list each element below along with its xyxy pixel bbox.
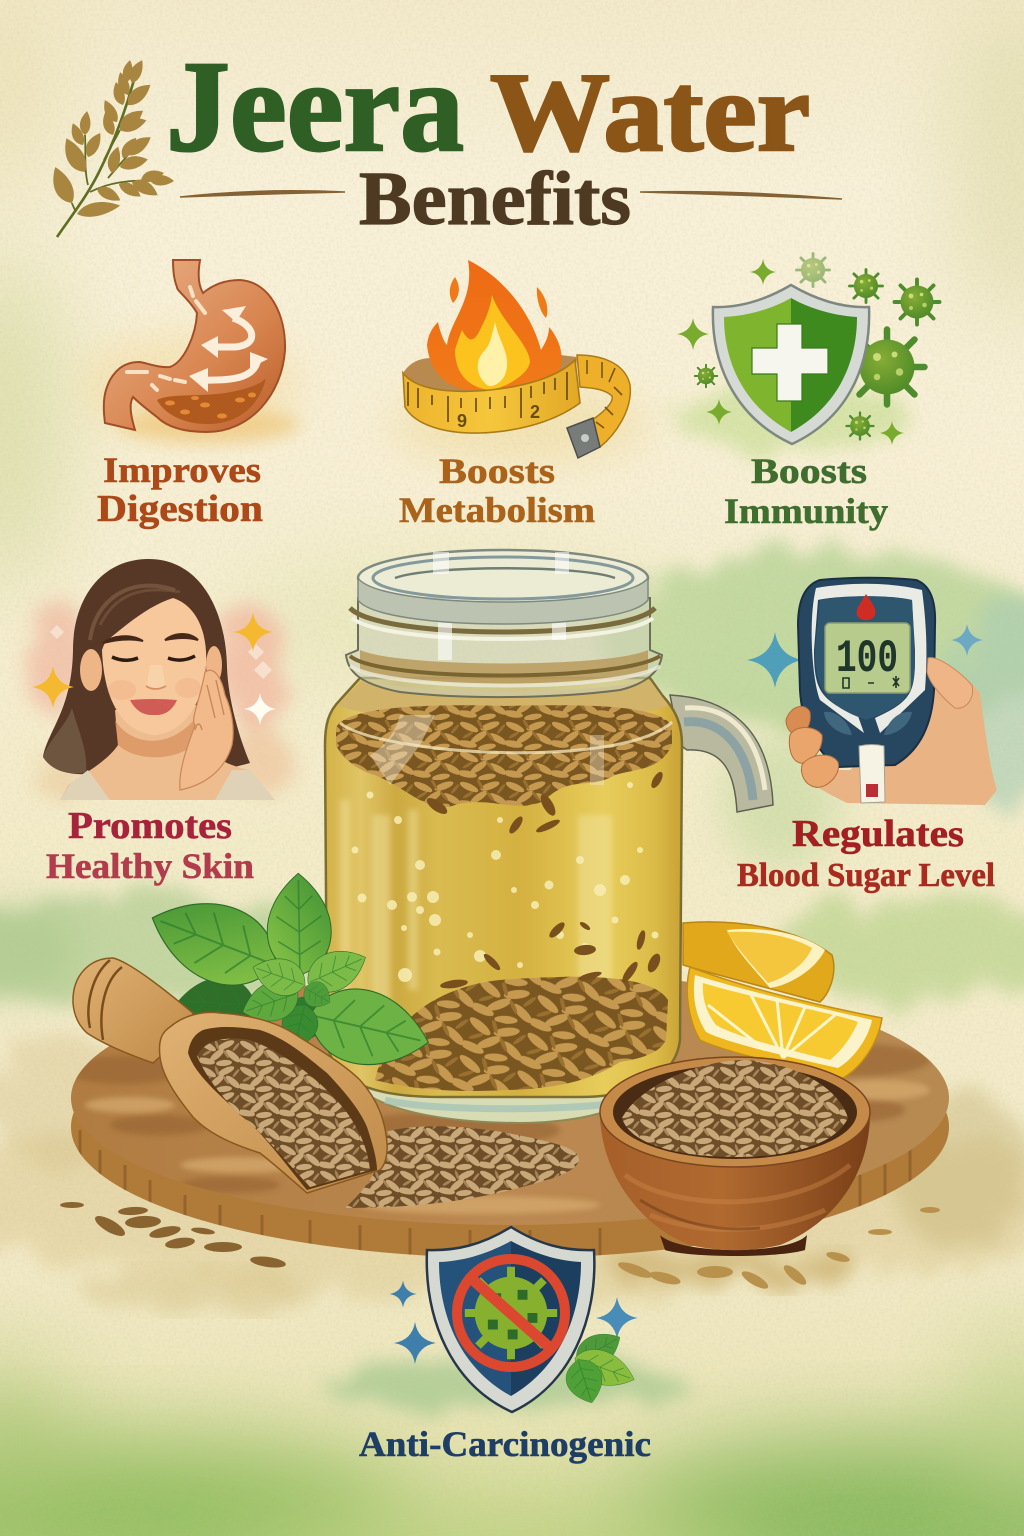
hair bbox=[43, 559, 250, 774]
label: Boosts Immunity: Immunity bbox=[724, 491, 888, 531]
title: Benefits: Benefits bbox=[359, 157, 631, 241]
vertical highlights bbox=[340, 800, 612, 1030]
shield bbox=[713, 285, 869, 444]
label: Boosts Immunity: Boosts bbox=[751, 451, 867, 491]
palm bbox=[800, 658, 997, 805]
fingers bbox=[786, 706, 810, 735]
tape tail bbox=[577, 355, 630, 447]
sparkles bbox=[677, 259, 904, 445]
face bbox=[80, 649, 102, 691]
divider right bbox=[640, 192, 842, 199]
icon: glucose meter in hand bbox=[747, 578, 997, 805]
blood drop bbox=[857, 594, 876, 620]
meter body bbox=[798, 578, 935, 767]
wooden board bbox=[65, 971, 949, 1261]
scattered seeds bbox=[60, 1126, 940, 1292]
floating seeds bbox=[424, 770, 665, 990]
shoulders and neck bbox=[60, 705, 275, 800]
label: Improves Digestion: Improves bbox=[103, 450, 261, 490]
label: Regulates Blood Sugar Level bbox=[737, 813, 995, 894]
label: Anti-Carcinogenic: Anti-Carcinogenic bbox=[359, 1424, 651, 1464]
suspended specks bbox=[342, 782, 658, 982]
wooden scoop bbox=[73, 958, 387, 1193]
jar base bbox=[340, 1040, 678, 1123]
label: Boosts Metabolism bbox=[399, 451, 595, 530]
icon: flame and measuring tape bbox=[403, 260, 630, 458]
title: Water: Water bbox=[490, 51, 810, 175]
label: Regulates Blood Sugar Level: Blood Sugar Level bbox=[737, 857, 995, 894]
label: Boosts Immunity bbox=[724, 451, 888, 531]
jar handle bbox=[670, 695, 773, 812]
icon: herb sprig bbox=[46, 58, 174, 237]
mint sprig bbox=[561, 1324, 640, 1408]
tape inner back bbox=[403, 355, 577, 395]
top seed layer bbox=[336, 705, 672, 807]
jar rim bbox=[358, 550, 648, 606]
title bbox=[166, 35, 842, 241]
label: Regulates Blood Sugar Level: Regulates bbox=[792, 813, 964, 855]
label: Boosts Metabolism: Boosts bbox=[439, 451, 555, 491]
virus cluster bbox=[695, 254, 940, 440]
back lemon bbox=[683, 922, 834, 1002]
front lemon bbox=[687, 967, 882, 1078]
label: Promotes Healthy Skin: Healthy Skin bbox=[46, 846, 254, 886]
jar body bbox=[325, 678, 682, 1097]
hand bbox=[180, 670, 233, 790]
icon: woman with healthy skin bbox=[25, 559, 292, 800]
tape tip bbox=[567, 418, 600, 458]
bottom seed layer bbox=[375, 977, 668, 1091]
flame bbox=[427, 260, 562, 390]
label: Promotes Healthy Skin: Promotes bbox=[68, 805, 232, 847]
label: Improves Digestion bbox=[97, 450, 263, 530]
test strip bbox=[859, 744, 885, 803]
jar neck bbox=[346, 598, 662, 697]
tape ring bbox=[403, 360, 580, 433]
icon: flame and measuring tape: 2 bbox=[530, 402, 540, 422]
lemon slices bbox=[683, 922, 882, 1078]
icon: flame and measuring tape: 9 bbox=[457, 411, 467, 431]
title: Jeera: Jeera bbox=[166, 35, 464, 179]
icon: anti-carcinogenic shield bbox=[390, 1227, 640, 1412]
divider left bbox=[180, 191, 345, 197]
shoulder tint bbox=[338, 680, 668, 720]
label: Improves Digestion: Digestion bbox=[97, 488, 263, 530]
mint leaves bbox=[139, 873, 437, 1078]
label: Promotes Healthy Skin bbox=[46, 805, 254, 886]
jar of jeera water bbox=[325, 550, 773, 1123]
label: Boosts Metabolism: Metabolism bbox=[399, 490, 595, 530]
icon: immunity shield and viruses bbox=[677, 254, 940, 445]
icon: stomach bbox=[104, 260, 300, 443]
wooden bowl of seeds bbox=[600, 1057, 870, 1256]
glucose reading: 100 bbox=[836, 633, 898, 685]
